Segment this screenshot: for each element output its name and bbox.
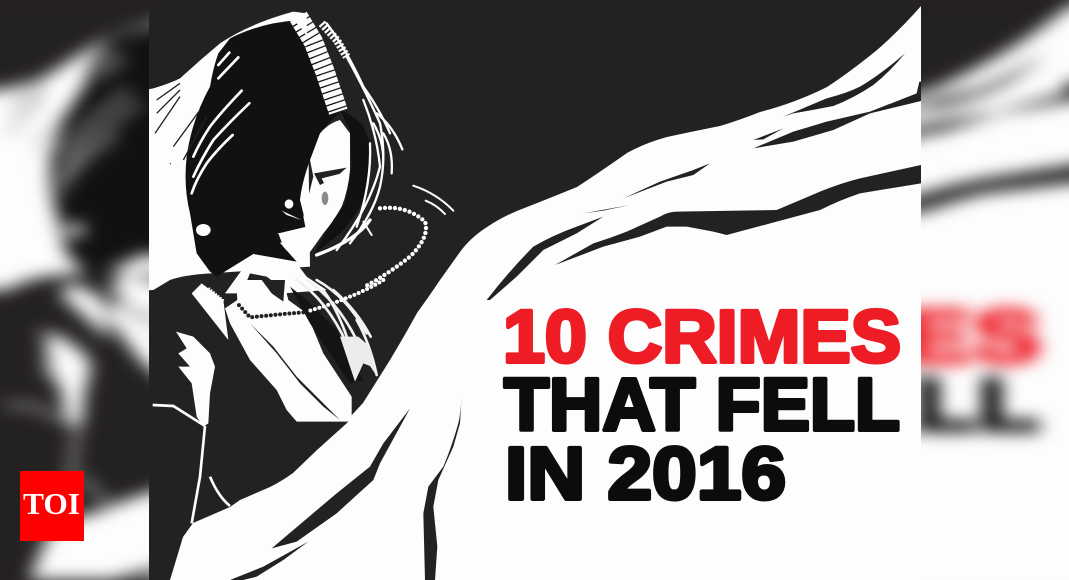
arm outline lines — [153, 405, 230, 523]
headline line 1: 10 CRIMES: 10 CRIMES — [503, 295, 901, 378]
dark hair strand beside face — [313, 110, 372, 255]
woman: body and clothing — [153, 280, 383, 523]
headline line 3: IN 2016: IN 2016 — [505, 432, 786, 515]
cloth folds, upper right — [487, 53, 960, 300]
woman: hair and face — [100, 12, 453, 293]
necklace, lower loop — [310, 280, 383, 311]
hair part, feathered — [298, 17, 338, 112]
nose and lips — [276, 199, 302, 251]
right hair strands — [317, 23, 402, 255]
face shape — [280, 120, 350, 257]
left hair shading strokes — [155, 83, 207, 164]
hair streaks — [192, 53, 249, 193]
collar — [192, 283, 228, 340]
blouse inner line — [250, 323, 340, 420]
headline line 2: THAT FELL: THAT FELL — [504, 363, 900, 446]
earring — [196, 224, 211, 236]
hand — [176, 332, 215, 427]
headline — [503, 295, 901, 515]
hair bundle — [290, 287, 363, 383]
TOI logo: TOI — [23, 486, 80, 521]
main illustration panel — [149, 0, 921, 580]
cloth folds, lower — [230, 397, 462, 580]
white hair mass — [100, 12, 310, 293]
motion lines — [363, 186, 453, 235]
eye and tear — [314, 168, 347, 205]
neck white — [225, 254, 327, 293]
white blouse — [225, 280, 352, 422]
TOI logo — [20, 471, 84, 541]
white cloth — [170, 0, 960, 580]
necklace, upper loop — [363, 208, 426, 287]
black head and hair — [186, 21, 340, 277]
backdrop under the blur, bottom of right band — [921, 545, 1069, 580]
